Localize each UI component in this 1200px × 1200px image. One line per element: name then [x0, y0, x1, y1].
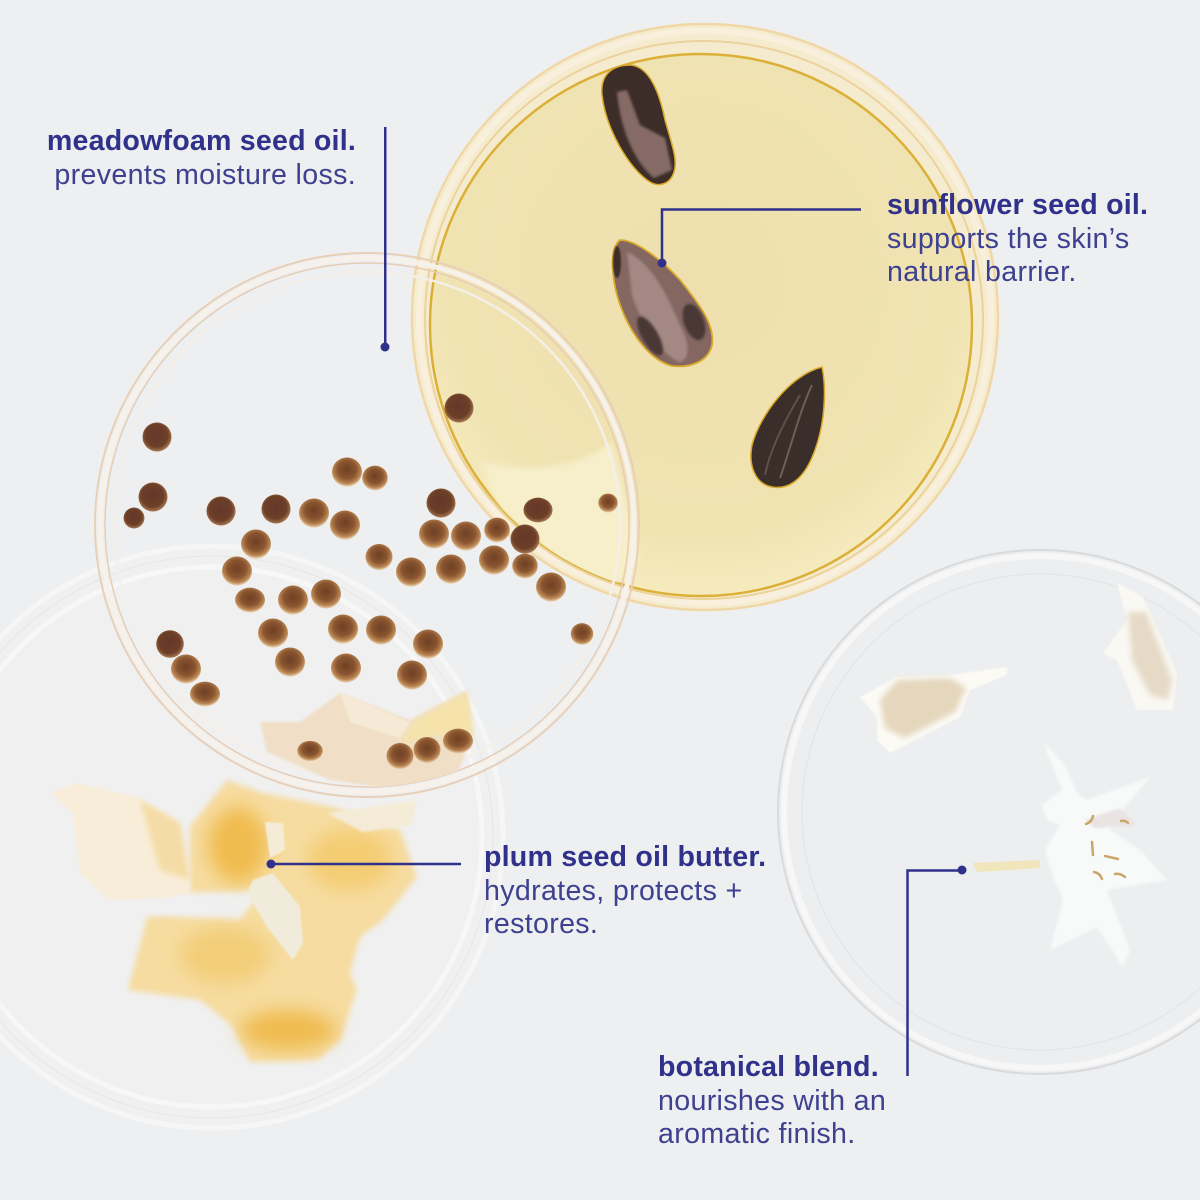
dish: plum seed oil butter	[0, 546, 503, 1128]
sunflower seed: bottom	[751, 367, 824, 487]
label: sunflower seed oil: sunflower seed oil.	[887, 189, 1148, 221]
label: sunflower seed oil	[887, 189, 1148, 288]
label: meadowfoam seed oil: meadowfoam seed oil.	[47, 125, 356, 157]
label: sunflower seed oil: supports the skin’s	[887, 222, 1130, 254]
label: plum seed oil butter: plum seed oil butter.	[484, 841, 766, 873]
stem	[973, 860, 1040, 872]
butter seen through dish	[260, 690, 473, 790]
dish: meadowfoam seed oil	[95, 253, 639, 797]
label: meadowfoam seed oil	[47, 125, 356, 190]
flower: bud left	[860, 667, 1007, 753]
leader line: plum	[266, 860, 461, 868]
butter	[50, 780, 417, 1062]
flower: top right	[1103, 583, 1177, 710]
label: botanical blend	[658, 1051, 886, 1150]
label: botanical blend: nourishes with an	[658, 1084, 886, 1116]
sunflower seed: middle	[613, 240, 712, 366]
sunflower seed: top	[602, 65, 675, 185]
leader line: meadowfoam	[380, 127, 390, 352]
seeds	[124, 394, 618, 769]
dish: sunflower seed oil	[412, 24, 998, 610]
dish: botanical blend	[778, 550, 1200, 1074]
label: plum seed oil butter: restores.	[484, 908, 598, 940]
label: botanical blend: botanical blend.	[658, 1051, 879, 1083]
leader line: sunflower	[658, 210, 861, 268]
leader line: botanical	[908, 866, 966, 1076]
label: plum seed oil butter: hydrates, protects +	[484, 874, 743, 906]
label: meadowfoam seed oil: prevents moisture loss.	[54, 158, 356, 190]
oil highlight	[482, 443, 640, 584]
label: sunflower seed oil: natural barrier.	[887, 256, 1077, 288]
flower: white blossom	[973, 742, 1167, 967]
label: botanical blend: aromatic finish.	[658, 1118, 856, 1150]
label: plum seed oil butter	[484, 841, 766, 940]
